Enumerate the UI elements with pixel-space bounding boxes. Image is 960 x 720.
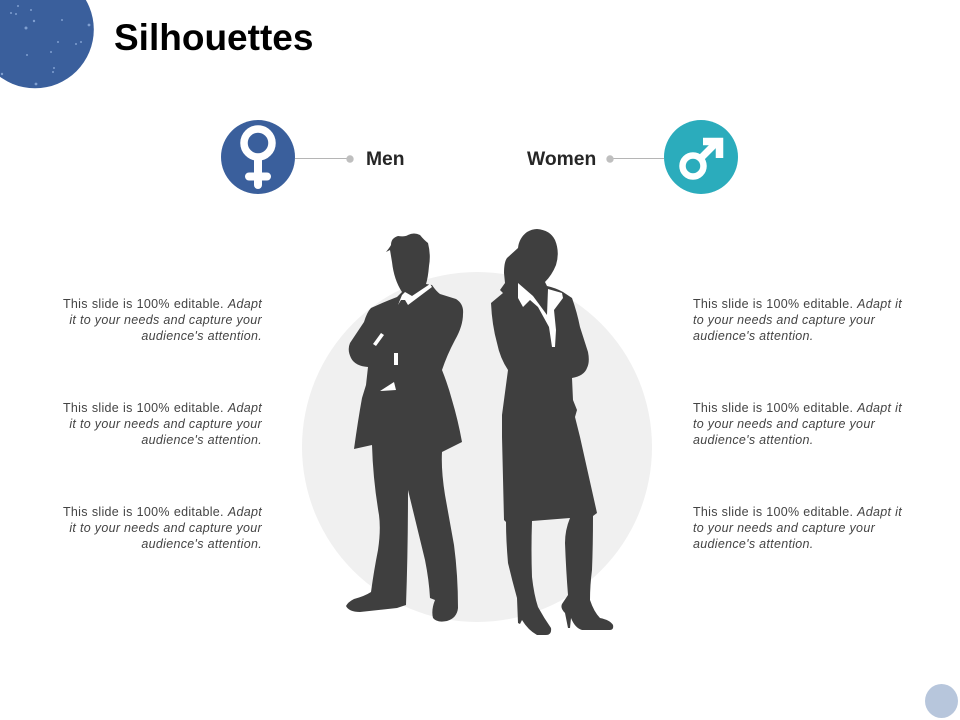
background circle	[302, 272, 652, 622]
text block: left 3: audience's attention.	[141, 537, 262, 551]
text block: left 3	[63, 505, 262, 551]
text block: left 1: This slide is 100% editable. Adapt	[63, 297, 262, 311]
text block: left 2	[63, 401, 262, 447]
connector: Men	[295, 155, 354, 163]
silhouette: man	[346, 234, 463, 622]
icon: male symbol, Women	[664, 120, 738, 194]
label: Men: Men	[366, 149, 405, 170]
title: Silhouettes	[114, 17, 313, 58]
text block: right 1: to your needs and capture your	[693, 313, 875, 327]
text block: right 3: audience's attention.	[693, 537, 814, 551]
text block: left 2: it to your needs and capture your	[69, 417, 262, 431]
text block: left 3: This slide is 100% editable. Adapt	[63, 505, 262, 519]
label: Women: Women	[527, 149, 596, 170]
text block: right 1: audience's attention.	[693, 329, 814, 343]
text block: right 1: This slide is 100% editable. Adapt it	[693, 297, 902, 311]
text block: left 3: it to your needs and capture your	[69, 521, 262, 535]
text block: left 1: it to your needs and capture your	[69, 313, 262, 327]
text block: left 1	[63, 297, 262, 343]
icon: female symbol, Men	[221, 120, 295, 194]
text block: right 3: This slide is 100% editable. Adapt it	[693, 505, 902, 519]
text block: left 2: This slide is 100% editable. Adapt	[63, 401, 262, 415]
text block: right 2: to your needs and capture your	[693, 417, 875, 431]
connector: Women	[606, 155, 664, 163]
text block: right 2	[693, 401, 902, 447]
text block: right 2: audience's attention.	[693, 433, 814, 447]
text block: left 1: audience's attention.	[141, 329, 262, 343]
silhouette: woman	[491, 229, 613, 635]
text block: right 3: to your needs and capture your	[693, 521, 875, 535]
text block: right 1	[693, 297, 902, 343]
text block: right 2: This slide is 100% editable. Adapt it	[693, 401, 902, 415]
text block: right 3	[693, 505, 902, 551]
decorative corner circle	[0, 0, 94, 88]
text block: left 2: audience's attention.	[141, 433, 262, 447]
decorative page circle	[925, 684, 958, 718]
